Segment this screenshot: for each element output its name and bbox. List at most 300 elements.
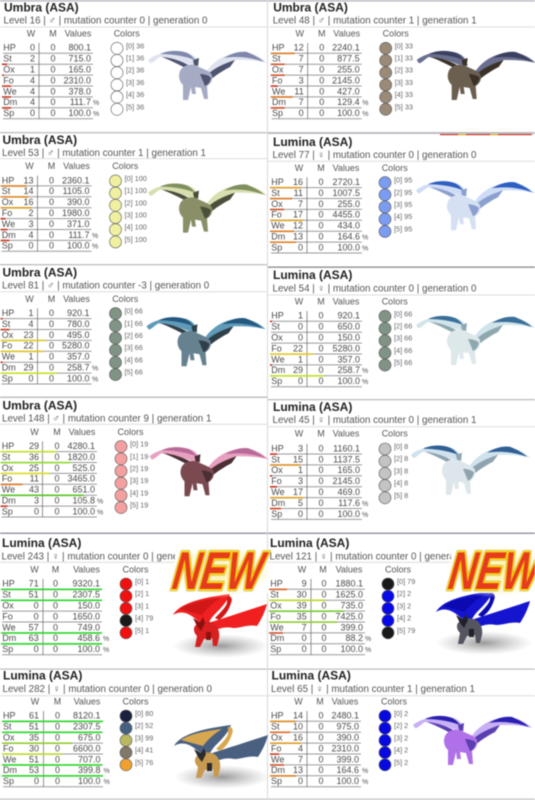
stats table bbox=[268, 696, 535, 787]
stats table: 0 bbox=[53, 611, 58, 621]
color swatches: [5] 76 bbox=[135, 758, 153, 767]
stats table: Dm bbox=[271, 765, 285, 775]
icon: dragon bbox=[146, 317, 266, 366]
color swatches: [2] 2 bbox=[394, 721, 408, 730]
stats table: St bbox=[271, 188, 280, 198]
stats table: 427.0 bbox=[337, 86, 360, 96]
stats table: 7 bbox=[298, 754, 303, 764]
stats table: % bbox=[103, 647, 109, 654]
panel: Lumina level 243 bbox=[0, 536, 275, 658]
stats table: 0 bbox=[49, 230, 54, 240]
subtitle: Level 45 | ♀ | mutation counter 0 | generation 1 bbox=[272, 415, 476, 426]
stats table: 88.2 bbox=[345, 633, 363, 643]
stats table: 357.0 bbox=[67, 352, 90, 362]
stats table: W bbox=[30, 564, 39, 574]
stats table: Colors bbox=[383, 28, 409, 38]
stats table: 258.7 bbox=[67, 362, 90, 372]
stats table: Fo bbox=[271, 343, 282, 353]
color swatches bbox=[382, 577, 415, 639]
stats table: % bbox=[362, 234, 368, 242]
stats table bbox=[0, 27, 267, 119]
color swatches: [5] 19 bbox=[130, 501, 148, 510]
stats table: St bbox=[2, 186, 11, 196]
stats table: Colors bbox=[112, 294, 139, 304]
stats table: % bbox=[103, 636, 109, 643]
stats table: 0 bbox=[49, 308, 54, 318]
panel: Umbra level 53 bbox=[0, 133, 268, 252]
stats table: 1 bbox=[30, 64, 35, 74]
title: Lumina (ASA) bbox=[273, 268, 352, 282]
stats table: 399.0 bbox=[340, 622, 363, 632]
stats table: Fo bbox=[2, 341, 12, 351]
color swatches: [5] 1 bbox=[135, 626, 149, 635]
subtitle: Level 54 | ♀ | mutation counter 0 | generation 0 bbox=[272, 283, 477, 294]
stats table: 0 bbox=[28, 373, 34, 383]
stats table: 35 bbox=[297, 611, 307, 621]
color swatches: [2] 33 bbox=[395, 66, 413, 75]
stats table: Colors bbox=[382, 163, 408, 173]
stats table: Fo bbox=[2, 474, 12, 484]
stats table: 7 bbox=[299, 97, 304, 107]
stats table: 0 bbox=[50, 75, 56, 85]
color swatches: [0] 8 bbox=[394, 442, 408, 451]
color swatches: [0] 2 bbox=[394, 709, 408, 718]
stats table: 390.0 bbox=[67, 197, 90, 207]
stats table: 0 bbox=[54, 506, 60, 516]
stats table: 4 bbox=[28, 319, 34, 329]
stats table: 0 bbox=[298, 776, 303, 786]
stats table: Values bbox=[63, 161, 90, 171]
stats table: % bbox=[97, 509, 103, 516]
stats table: 30 bbox=[29, 743, 39, 753]
color swatches: [0] 95 bbox=[394, 176, 412, 185]
stats table: 0 bbox=[318, 443, 324, 453]
color swatches: [0] 36 bbox=[126, 41, 144, 50]
stats table: % bbox=[362, 368, 368, 375]
color swatches: [3] 66 bbox=[124, 343, 143, 352]
stats table: 111.7 bbox=[70, 97, 91, 107]
stats table: 71 bbox=[29, 579, 39, 589]
subtitle: Level 243 | ♀ | mutation counter 0 | generation 0 bbox=[2, 551, 211, 562]
stats table: Dm bbox=[272, 97, 286, 107]
stats table: 29 bbox=[29, 441, 39, 451]
stats table: Colors bbox=[117, 427, 144, 437]
color swatches: [3] 100 bbox=[124, 211, 147, 220]
stats table: 0 bbox=[321, 633, 327, 643]
stats table: 12 bbox=[294, 43, 304, 53]
stats table: 164.6 bbox=[337, 232, 360, 242]
stats table: W bbox=[25, 294, 34, 304]
stats table: 7 bbox=[302, 622, 307, 632]
stats table: St bbox=[271, 322, 280, 332]
stats table: % bbox=[92, 233, 98, 240]
stats table: Sp bbox=[2, 373, 13, 383]
stats table: We bbox=[271, 487, 285, 497]
color swatches: [3] 36 bbox=[126, 78, 144, 87]
stats table: 0 bbox=[49, 373, 54, 383]
stats table: 0 bbox=[318, 322, 324, 332]
stats table: 29 bbox=[23, 362, 34, 372]
icon: dragon bbox=[150, 447, 268, 496]
stats table: 0 bbox=[318, 354, 324, 364]
stats table: 1105.0 bbox=[63, 186, 90, 196]
stats table: 1 bbox=[28, 352, 34, 362]
stats table: Colors bbox=[122, 696, 149, 706]
stats table: We bbox=[3, 86, 17, 96]
stats table: 100.0 bbox=[77, 644, 100, 654]
stats table: 4 bbox=[28, 230, 34, 240]
icon: dragon bbox=[417, 51, 535, 100]
stats table: 5280.0 bbox=[332, 343, 360, 353]
color swatches: [5] 100 bbox=[124, 235, 147, 244]
stats table: 100.0 bbox=[78, 776, 100, 786]
title: Lumina (ASA) bbox=[3, 668, 82, 682]
stats table: 1160.1 bbox=[333, 443, 360, 453]
stats table: 399.8 bbox=[78, 765, 100, 775]
stats table: 0 bbox=[318, 476, 324, 486]
stats table: 0 bbox=[318, 711, 324, 721]
color swatches: [4] 2 bbox=[394, 746, 408, 755]
stats table: % bbox=[362, 512, 368, 519]
color swatches: [0] 80 bbox=[135, 709, 153, 718]
color swatches: [2] 2 bbox=[397, 589, 411, 598]
stats table: Ox bbox=[3, 64, 15, 74]
stats table: % bbox=[92, 365, 98, 372]
stats table: 61 bbox=[29, 711, 39, 721]
color swatches: [4] 36 bbox=[126, 90, 144, 99]
stats table: 36 bbox=[29, 452, 39, 462]
stats table: Dm bbox=[2, 230, 16, 240]
stats table: 0 bbox=[53, 633, 58, 643]
stats table: 0 bbox=[318, 754, 324, 764]
stats table: HP bbox=[272, 43, 285, 53]
stats table: M bbox=[54, 696, 61, 706]
stats table: HP bbox=[3, 43, 16, 53]
stats table: 0 bbox=[54, 441, 60, 451]
stats table: 0 bbox=[319, 43, 324, 53]
stats table bbox=[0, 696, 267, 787]
color swatches: [4] 33 bbox=[395, 90, 413, 99]
stats table: 100.0 bbox=[67, 241, 90, 251]
panel: Lumina level 77 bbox=[268, 135, 535, 253]
stats table: 0 bbox=[318, 732, 324, 742]
color swatches: [3] 8 bbox=[394, 466, 408, 475]
stats table: 2145.0 bbox=[332, 75, 360, 85]
stats table: 0 bbox=[318, 311, 324, 321]
stats table: 0 bbox=[53, 600, 58, 610]
color swatches: [0] 100 bbox=[124, 174, 147, 183]
color swatches: [0] 66 bbox=[394, 309, 412, 318]
stats table: 14 bbox=[23, 186, 34, 196]
subtitle: Level 53 | ♂ | mutation counter 1 | generation 1 bbox=[2, 148, 206, 159]
icon: dragon bbox=[411, 446, 530, 495]
stats table: Sp bbox=[271, 776, 282, 786]
stats table: 11 bbox=[30, 474, 39, 484]
stats table: 0 bbox=[30, 108, 35, 118]
stats table: 0 bbox=[34, 600, 39, 610]
color swatches: [3] 95 bbox=[394, 200, 412, 209]
stats table: 258.7 bbox=[337, 365, 360, 375]
stats table: 39 bbox=[297, 600, 307, 610]
stats table: % bbox=[362, 501, 368, 508]
subtitle: Level 65 | ♀ | mutation counter 1 | generation 1 bbox=[271, 684, 475, 695]
stats table: 0 bbox=[55, 743, 60, 753]
stats table: Sp bbox=[2, 644, 13, 654]
stats table: 3 bbox=[299, 75, 304, 85]
stats table: 1980.0 bbox=[62, 208, 90, 218]
stats table: % bbox=[93, 100, 99, 107]
stats table: 920.1 bbox=[67, 308, 90, 318]
stats table: % bbox=[362, 779, 368, 786]
stats table: 780.0 bbox=[67, 319, 90, 329]
color swatches bbox=[111, 41, 144, 115]
stats table: 0 bbox=[50, 54, 56, 64]
stats table: 651.0 bbox=[72, 485, 95, 495]
stats table: 749.0 bbox=[77, 622, 100, 632]
stats table: Ox bbox=[271, 732, 283, 742]
stats table: 0 bbox=[321, 579, 327, 589]
stats table: 0 bbox=[53, 644, 58, 654]
stats table: St bbox=[2, 319, 11, 329]
stats table: HP bbox=[2, 579, 15, 589]
color swatches: [4] 66 bbox=[394, 346, 412, 355]
stats table: 6600.0 bbox=[73, 743, 100, 753]
stats table: 0 bbox=[321, 600, 327, 610]
stats table: Values bbox=[333, 296, 360, 306]
stats table bbox=[0, 292, 268, 384]
stats table: 4 bbox=[30, 75, 35, 85]
color swatches: [0] 79 bbox=[397, 577, 415, 586]
stats table: 100.0 bbox=[337, 242, 360, 252]
stats table: 0 bbox=[49, 175, 54, 185]
stats table: Dm bbox=[3, 765, 17, 775]
stats table: M bbox=[317, 429, 325, 439]
stats table: Values bbox=[63, 294, 90, 304]
stats table: 0 bbox=[298, 242, 303, 252]
stats table: 35 bbox=[29, 732, 39, 742]
title: Lumina (ASA) bbox=[272, 668, 351, 682]
stats table: Dm bbox=[271, 365, 285, 375]
color swatches bbox=[379, 442, 408, 504]
stats table: 51 bbox=[29, 590, 39, 600]
stats table: 4455.0 bbox=[332, 210, 360, 220]
title: Umbra (ASA) bbox=[4, 0, 79, 14]
stats table: 0 bbox=[50, 108, 56, 118]
stats table: % bbox=[362, 111, 368, 118]
color swatches bbox=[110, 174, 147, 248]
stats table: 0 bbox=[49, 186, 54, 196]
stats table: 14 bbox=[293, 711, 303, 721]
color swatches: [2] 66 bbox=[124, 331, 143, 340]
stats table: 877.5 bbox=[337, 54, 360, 64]
stats table: 0 bbox=[318, 210, 324, 220]
stats table: 0 bbox=[298, 509, 303, 519]
color swatches: [2] 66 bbox=[394, 322, 412, 330]
stats table: 5 bbox=[298, 498, 303, 508]
stats table: 458.6 bbox=[77, 633, 100, 643]
stats table: Ox bbox=[271, 332, 283, 342]
stats table: Sp bbox=[2, 241, 13, 251]
color swatches: [5] 66 bbox=[124, 368, 143, 377]
stats table: 1007.5 bbox=[332, 188, 360, 198]
stats table: 0 bbox=[318, 177, 324, 187]
stats table: M bbox=[49, 28, 57, 38]
stats table: Sp bbox=[272, 108, 283, 118]
stats table: We bbox=[271, 754, 284, 764]
stats table: M bbox=[319, 564, 327, 574]
stats table: Fo bbox=[3, 743, 14, 753]
stats table: We bbox=[3, 754, 16, 764]
color swatches bbox=[110, 307, 143, 381]
stats table: Sp bbox=[3, 776, 14, 786]
stats table: Colors bbox=[114, 28, 140, 38]
stats table: 0 bbox=[49, 219, 54, 229]
badge: NEW: NEW bbox=[169, 541, 271, 601]
stats table: Colors bbox=[112, 161, 139, 171]
stats table: 1 bbox=[298, 465, 303, 475]
stats table: 399.0 bbox=[336, 754, 359, 764]
stats table: 53 bbox=[29, 765, 39, 775]
stats table: 0 bbox=[318, 743, 324, 753]
stats table: 0 bbox=[302, 633, 307, 643]
stats table: 9 bbox=[302, 579, 307, 589]
stats table: Sp bbox=[271, 242, 282, 252]
stats table: W bbox=[295, 296, 304, 306]
stats table: Dm bbox=[2, 362, 16, 372]
stats table: 2307.5 bbox=[72, 590, 100, 600]
stats table: Sp bbox=[271, 509, 282, 519]
subtitle: Level 16 | ♂ | mutation counter 0 | generation 0 bbox=[4, 16, 208, 26]
stats table: Values bbox=[65, 28, 92, 38]
stats table: M bbox=[48, 294, 55, 304]
stats table: 0 bbox=[53, 579, 58, 589]
stats table: 4 bbox=[30, 86, 35, 96]
stats table: % bbox=[92, 244, 98, 251]
stats table: We bbox=[271, 354, 285, 364]
stats table: Colors bbox=[382, 429, 408, 439]
color swatches: [3] 2 bbox=[397, 601, 411, 610]
color swatches: [0] 66 bbox=[124, 307, 143, 316]
stats table: 2240.1 bbox=[332, 43, 360, 53]
stats table: 0 bbox=[319, 86, 324, 96]
stats table: 0 bbox=[318, 221, 324, 231]
stats table: 17 bbox=[293, 487, 303, 497]
stats table bbox=[268, 295, 535, 387]
color swatches: [3] 19 bbox=[130, 476, 148, 485]
color swatches bbox=[380, 41, 413, 115]
stats table: 0 bbox=[318, 376, 324, 386]
color swatches: [4] 100 bbox=[124, 223, 147, 232]
stats table: 0 bbox=[55, 776, 60, 786]
stats table: 2310.0 bbox=[331, 743, 359, 753]
stats table: 7 bbox=[298, 199, 303, 209]
color swatches: [3] 99 bbox=[135, 733, 153, 742]
stats table: 0 bbox=[318, 343, 324, 353]
stats table bbox=[268, 427, 535, 520]
stats table: 0 bbox=[302, 644, 307, 654]
stats table: 164.6 bbox=[336, 765, 359, 775]
stats table: 100.0 bbox=[337, 108, 360, 118]
stats table: We bbox=[2, 352, 15, 362]
stats table: % bbox=[362, 245, 368, 252]
stats table: 1625.0 bbox=[335, 590, 363, 600]
stats table: 0 bbox=[50, 86, 56, 96]
stats table bbox=[268, 562, 535, 655]
stats table: We bbox=[271, 221, 285, 231]
stats table: 0 bbox=[30, 43, 35, 53]
stats table: We bbox=[2, 622, 16, 632]
stats table: 0 bbox=[54, 474, 60, 484]
color swatches: [3] 66 bbox=[394, 334, 412, 343]
stats table: Sp bbox=[271, 376, 282, 386]
stats table: 100.0 bbox=[67, 373, 90, 383]
stats table: 434.0 bbox=[337, 221, 360, 231]
panel: Lumina level 282 bbox=[0, 668, 270, 789]
stats table: 0 bbox=[318, 365, 324, 375]
stats table: Sp bbox=[270, 644, 281, 654]
stats table: We bbox=[270, 622, 284, 632]
stats table: M bbox=[316, 696, 324, 706]
stats table: 0 bbox=[53, 590, 58, 600]
stats table: 105.8 bbox=[72, 495, 95, 505]
stats table: Dm bbox=[2, 633, 16, 643]
icon: dragon bbox=[174, 725, 270, 789]
stats table: Ox bbox=[2, 463, 14, 473]
stats table: HP bbox=[271, 177, 284, 187]
stats table: Values bbox=[333, 429, 360, 439]
stats table: Values bbox=[333, 163, 360, 173]
color swatches: [1] 19 bbox=[130, 452, 148, 461]
stats table: 0 bbox=[49, 341, 54, 351]
stats table: 0 bbox=[318, 465, 324, 475]
panel: Umbra level 148 bbox=[0, 398, 268, 517]
stats table: 150.0 bbox=[77, 600, 100, 610]
title: Umbra (ASA) bbox=[2, 133, 77, 147]
stats table: Fo bbox=[272, 75, 283, 85]
stats table: HP bbox=[271, 311, 284, 321]
subtitle: Level 81 | ♂ | mutation counter -3 | generation 0 bbox=[2, 281, 210, 292]
stats table: 0 bbox=[53, 622, 58, 632]
stats table: Values bbox=[333, 28, 361, 38]
stats table: 0 bbox=[319, 54, 324, 64]
color swatches: [4] 2 bbox=[397, 614, 411, 623]
stats table: 495.0 bbox=[67, 330, 90, 340]
stats table: Colors bbox=[381, 696, 407, 706]
color swatches: [5] 33 bbox=[395, 102, 413, 111]
stats table: Fo bbox=[271, 476, 282, 486]
color swatches: [3] 1 bbox=[135, 601, 149, 610]
stats table bbox=[268, 161, 535, 253]
stats table: HP bbox=[271, 711, 284, 721]
stats table: 111.7 bbox=[68, 230, 90, 240]
stats table: 0 bbox=[299, 108, 304, 118]
stats table: 0 bbox=[318, 487, 324, 497]
icon: dragon bbox=[173, 594, 269, 658]
stats table: Ox bbox=[271, 199, 283, 209]
stats table: Values bbox=[332, 696, 359, 706]
stats table: 100.0 bbox=[72, 506, 95, 516]
stats table: St bbox=[270, 590, 279, 600]
stats table: We bbox=[2, 219, 15, 229]
color swatches: [0] 33 bbox=[395, 41, 413, 50]
stats table: 357.0 bbox=[337, 354, 360, 364]
stats table: 100.0 bbox=[337, 376, 360, 386]
stats table: % bbox=[365, 647, 371, 654]
color swatches: [5] 79 bbox=[397, 626, 415, 635]
stats table: M bbox=[52, 564, 59, 574]
stats table: HP bbox=[271, 443, 284, 453]
stats table: 0 bbox=[298, 376, 303, 386]
